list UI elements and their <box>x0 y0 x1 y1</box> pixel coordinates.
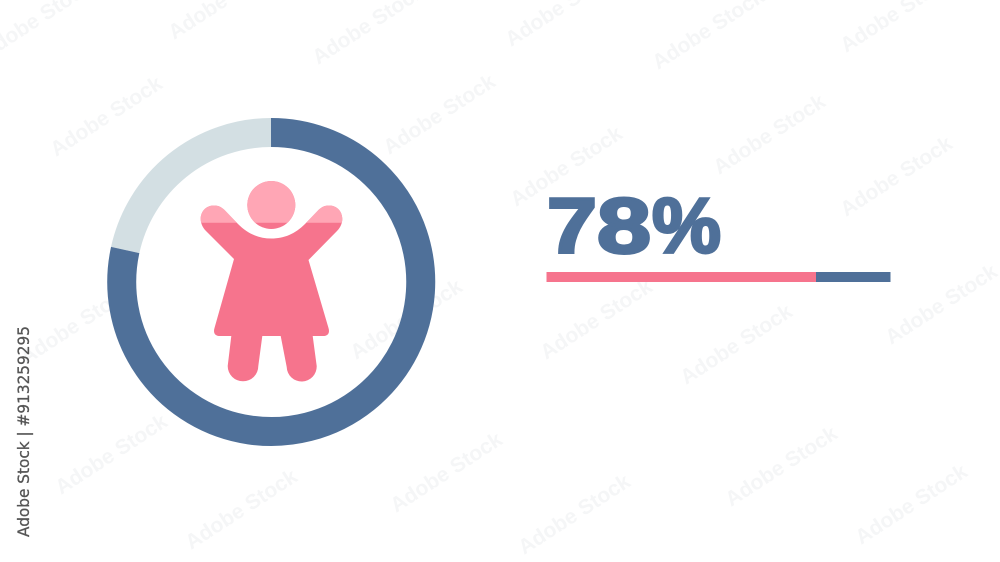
percentage value: % <box>652 182 721 270</box>
stock id label: Adobe Stock | #913259295 <box>14 326 33 537</box>
progress bar <box>546 272 890 282</box>
icon: body <box>201 206 342 382</box>
watermark pattern: Adobe Stock <box>721 422 842 511</box>
icon: girl with raised arms <box>201 181 342 382</box>
remaining ring segment <box>125 132 271 250</box>
watermark pattern: Adobe Stock <box>851 460 972 549</box>
icon: lighter upper highlight <box>200 181 342 223</box>
percentage value: 7 <box>547 182 597 270</box>
watermark pattern: Adobe Stock <box>16 280 137 369</box>
watermark pattern: Adobe Stock <box>709 90 830 179</box>
donut chart: 78% <box>122 132 421 431</box>
watermark pattern: Adobe Stock <box>836 132 957 221</box>
watermark pattern: Adobe Stock <box>536 275 657 364</box>
percentage value: 8 <box>597 182 651 270</box>
percentage value <box>547 182 721 270</box>
watermark pattern: Adobe Stock <box>506 122 627 211</box>
watermark pattern: Adobe Stock <box>514 470 635 559</box>
watermark pattern: Adobe Stock <box>379 70 500 159</box>
watermark pattern: Adobe Stock <box>51 410 172 499</box>
progress bar: fill <box>546 272 816 282</box>
watermark pattern: Adobe Stock <box>881 260 1000 349</box>
filled ring segment <box>122 132 421 431</box>
watermark pattern: Adobe Stock <box>181 465 302 554</box>
progress bar: track <box>546 272 890 282</box>
watermark pattern: Adobe Stock <box>386 428 507 517</box>
icon: head <box>247 181 295 229</box>
watermark pattern: Adobe Stock <box>46 72 167 161</box>
watermark pattern: Adobe Stock <box>346 275 467 364</box>
watermark pattern: Adobe Stock <box>676 300 797 389</box>
